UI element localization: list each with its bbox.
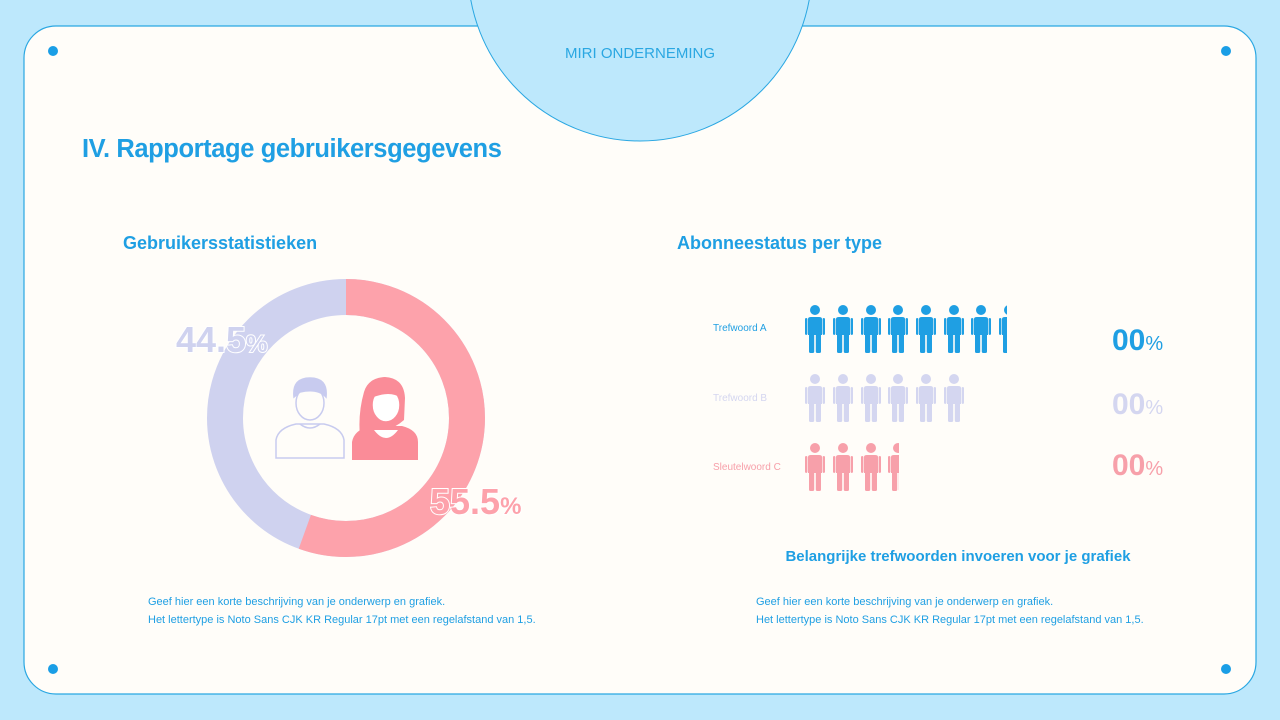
keyword caption: Belangrijke trefwoorden invoeren voor je grafiek bbox=[785, 548, 1131, 565]
icon: woman bbox=[352, 377, 418, 460]
row A bbox=[713, 305, 1163, 357]
text: Het lettertype is Noto Sans CJK KR Regular 17pt met een regelafstand van 1,5. bbox=[148, 614, 536, 626]
row B bbox=[713, 374, 1163, 422]
heading: subscriber status: Abonneestatus per type bbox=[677, 233, 882, 253]
description left: Geef hier een korte beschrijving van je onderwerp en grafiek. bbox=[148, 596, 445, 608]
heading: user statistics: Gebruikersstatistieken bbox=[123, 233, 317, 253]
row A: 00% bbox=[1112, 324, 1163, 357]
label 55.5%: 55.5% bbox=[430, 481, 521, 522]
row C: 00% bbox=[1112, 449, 1163, 482]
row C: Sleutelwoord C bbox=[713, 462, 781, 473]
description right: Geef hier een korte beschrijving van je onderwerp en grafiek. bbox=[756, 596, 1053, 608]
text: Het lettertype is Noto Sans CJK KR Regular 17pt met een regelafstand van 1,5. bbox=[756, 614, 1144, 626]
donut chart bbox=[176, 297, 521, 539]
title: IV. Rapportage gebruikersgegevens bbox=[82, 135, 502, 163]
row B: 00% bbox=[1112, 388, 1163, 421]
icon: man bbox=[276, 378, 344, 458]
row A: Trefwoord A bbox=[713, 323, 767, 334]
label 44.5%: 44.5% bbox=[176, 319, 267, 360]
company name: MIRI ONDERNEMING bbox=[565, 45, 715, 62]
row C bbox=[713, 443, 1163, 491]
row B: Trefwoord B bbox=[713, 393, 767, 404]
header circle bbox=[468, 0, 812, 141]
